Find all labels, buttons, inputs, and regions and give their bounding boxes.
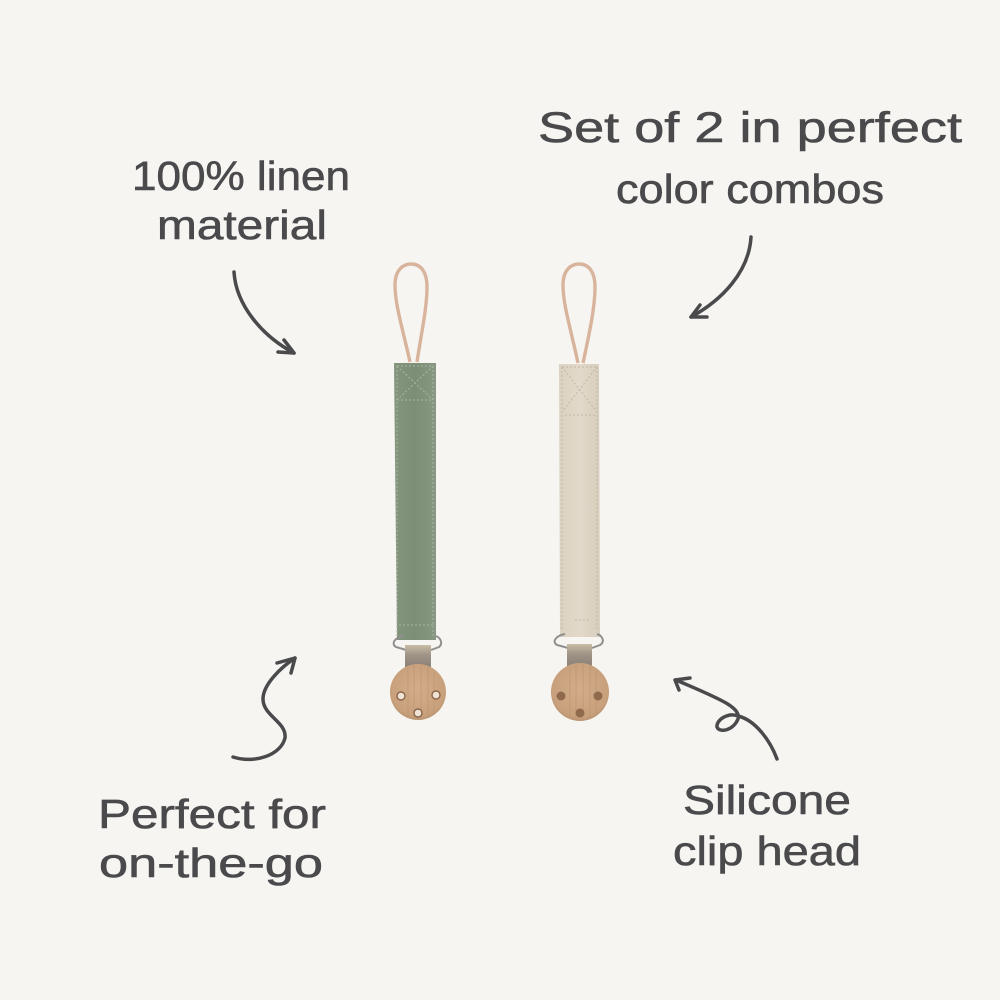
callout: 100% linen material: 100% linen (132, 153, 350, 199)
wooden clip (551, 663, 609, 721)
callout: silicone clip head: clip head (673, 828, 861, 874)
arrow: clip head with loop (675, 678, 777, 759)
elastic loop (395, 264, 427, 362)
metal plate (405, 645, 431, 667)
callout: perfect for on-the-go (98, 791, 326, 886)
callout: silicone clip head: Silicone (683, 777, 851, 823)
stitching (397, 366, 433, 636)
wood holes (397, 691, 440, 717)
metal plate (567, 644, 592, 666)
callout: 100% linen material: material (157, 202, 327, 248)
linen strap (559, 364, 600, 637)
arrow: combos to beige strap (691, 237, 751, 317)
callout: set of 2 in perfect color combos: Set of 2 in perfect (538, 104, 962, 152)
product: beige pacifier clip (551, 264, 609, 721)
arrow: on-the-go squiggle (233, 658, 295, 759)
callout: set of 2 in perfect color combos (538, 104, 962, 212)
metal ring (555, 634, 603, 648)
wooden clip (390, 664, 446, 720)
callout: set of 2 in perfect color combos: color combos (616, 166, 884, 212)
wood grain (408, 665, 434, 720)
callout: perfect for on-the-go: on-the-go (99, 840, 323, 886)
callout: 100% linen material (132, 153, 350, 248)
callout: perfect for on-the-go: Perfect for (98, 791, 326, 837)
arrow: linen to green strap (234, 272, 294, 353)
wood holes (556, 692, 602, 718)
callout: silicone clip head (673, 777, 861, 874)
metal ring (394, 636, 441, 650)
stitching (562, 367, 597, 630)
elastic loop (563, 264, 595, 363)
product: green pacifier clip (390, 264, 446, 720)
linen strap (394, 363, 436, 640)
wood grain (570, 664, 596, 720)
